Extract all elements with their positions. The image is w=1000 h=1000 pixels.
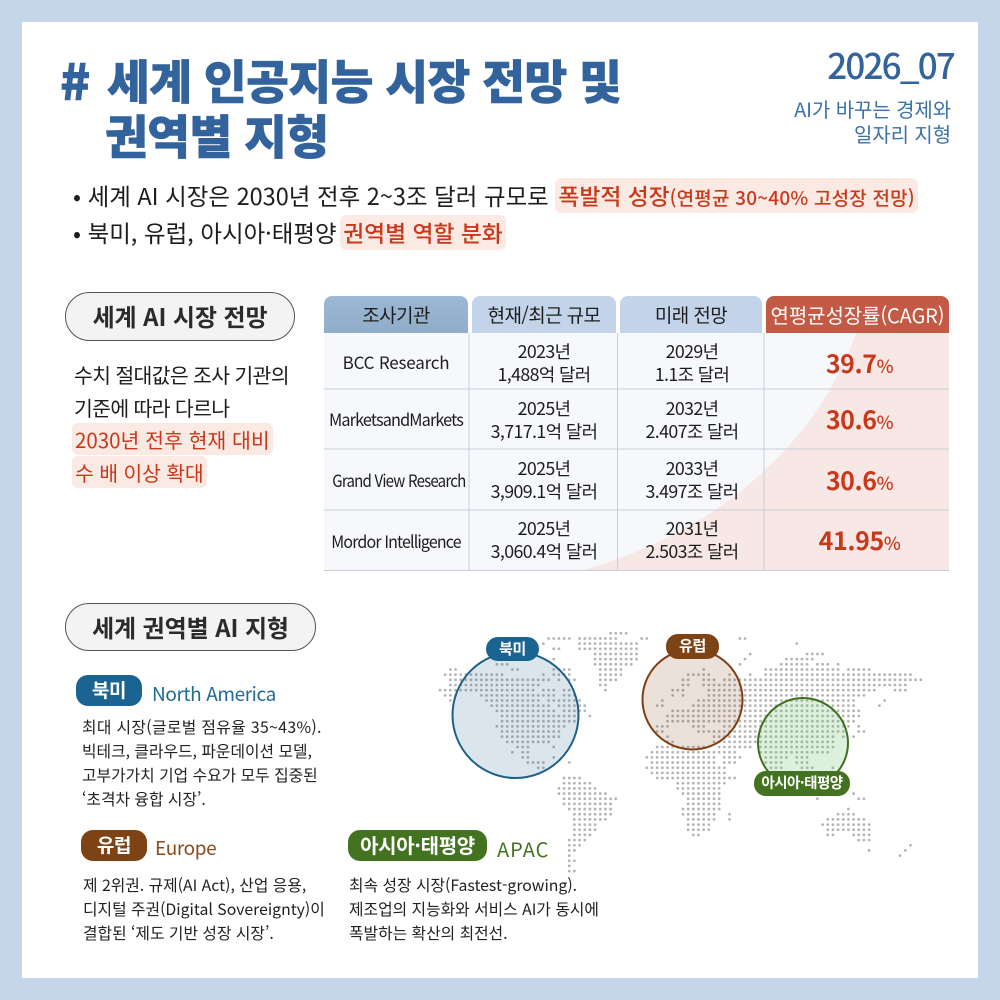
- table header: current size: [472, 296, 616, 333]
- row: BCC Research: [343, 338, 893, 387]
- row: BCC Research: 39.7%: [826, 345, 893, 381]
- series subtitle: AI가 바꾸는 경제와: [794, 94, 951, 123]
- map label: APAC: 아시아·태평양: [761, 772, 843, 793]
- row: MarketsandMarkets: 3,717.1억 달러: [491, 418, 597, 444]
- heading: regional AI landscape: [65, 603, 316, 651]
- row: MarketsandMarkets: 2.407조 달러: [645, 418, 739, 444]
- text: North America: 최대 시장(글로벌 점유율 35~43%).: [82, 715, 322, 738]
- title: #: [60, 43, 90, 115]
- map label: North America: [486, 637, 539, 661]
- row: MarketsandMarkets: MarketsandMarkets: [329, 406, 463, 431]
- row: Mordor Intelligence: 2031년: [666, 515, 718, 541]
- row: BCC Research: 2023년: [518, 338, 570, 364]
- market forecast table: [324, 333, 949, 571]
- row: BCC Research: BCC Research: [343, 349, 449, 374]
- market outlook text: 수치 절대값은 조사 기관의: [74, 359, 289, 389]
- tag: North America: 북미: [92, 676, 126, 703]
- series subtitle: [794, 94, 951, 148]
- row: Grand View Research: 3.497조 달러: [645, 478, 739, 504]
- english name: Europe: Europe: [155, 834, 216, 861]
- heading: regional AI landscape: 세계 권역별 AI 지형: [92, 609, 289, 644]
- text: North America: 빅테크, 클라우드, 파운데이션 모델,: [82, 739, 312, 762]
- title: 세계 인공지능 시장 전망 및: [107, 46, 621, 113]
- region circle: North America: [452, 652, 578, 778]
- text: North America: 고부가가치 기업 수요가 모두 집중된: [82, 763, 318, 786]
- row: BCC Research: 2029년: [666, 338, 718, 364]
- map label: North America: 북미: [499, 638, 526, 659]
- table header: research firm: [324, 296, 468, 333]
- key bullet points: • 세계 AI 시장은 2030년 전후 2~3조 달러 규모로 폭발적 성장(연평균 30~40% 고성장 전망): [73, 178, 915, 212]
- row: Mordor Intelligence: 2.503조 달러: [645, 538, 739, 564]
- row: Grand View Research: 30.6%: [826, 462, 893, 498]
- text: APAC: 제조업의 지능화와 서비스 AI가 동시에: [349, 897, 599, 920]
- text: North America: ‘초격차 융합 시장’.: [82, 787, 206, 810]
- table header: research firm: 조사기관: [362, 301, 430, 328]
- map label: Europe: 유럽: [679, 635, 706, 656]
- text: North America: [82, 715, 322, 810]
- row: MarketsandMarkets: 2025년: [518, 395, 570, 421]
- english name: North America: North America: [152, 680, 276, 707]
- key bullet points: • 북미, 유럽, 아시아·태평양 권역별 역할 분화: [73, 215, 503, 249]
- table header: current size: 현재/최근 규모: [488, 301, 600, 328]
- row: Mordor Intelligence: [331, 515, 900, 564]
- row: MarketsandMarkets: 2032년: [666, 395, 718, 421]
- tag: APAC: 아시아·태평양: [360, 830, 475, 859]
- row: Grand View Research: 3,909.1억 달러: [491, 478, 597, 504]
- row: Grand View Research: 2025년: [518, 455, 570, 481]
- row: BCC Research: 1,488억 달러: [497, 361, 591, 387]
- row: Grand View Research: Grand View Research: [332, 467, 465, 492]
- region circle: APAC: [758, 698, 848, 788]
- row: MarketsandMarkets: 30.6%: [826, 401, 893, 437]
- row: BCC Research: 1.1조 달러: [655, 361, 729, 387]
- market outlook text: 2030년 전후 현재 대비: [75, 424, 270, 454]
- market outlook text: 기준에 따라 다르나: [74, 392, 229, 422]
- text: APAC: [349, 873, 599, 944]
- row: Mordor Intelligence: 41.95%: [819, 522, 900, 558]
- row: Grand View Research: 2033년: [666, 455, 718, 481]
- text: APAC: 폭발하는 확산의 최전선.: [349, 921, 508, 944]
- market outlook text: [72, 359, 289, 488]
- english name: APAC: APAC: [497, 834, 549, 863]
- row: Mordor Intelligence: Mordor Intelligence: [331, 528, 461, 553]
- row: Grand View Research: [332, 455, 893, 504]
- tag: Europe: [81, 830, 147, 861]
- table header: forecast: [620, 296, 762, 333]
- row: MarketsandMarkets: [329, 395, 893, 444]
- text: APAC: 최속 성장 시장(Fastest-growing).: [349, 873, 577, 896]
- table background with growth curve: [324, 333, 949, 571]
- series subtitle: 일자리 지형: [854, 119, 951, 148]
- text: Europe: 디지털 주권(Digital Sovereignty)이: [83, 897, 325, 920]
- text: Europe: 제 2위권. 규제(AI Act), 산업 응용,: [83, 873, 306, 896]
- market outlook text: 수 배 이상 확대: [75, 456, 204, 486]
- region circle: Europe: [642, 650, 742, 750]
- row: Mordor Intelligence: 2025년: [518, 515, 570, 541]
- issue date: 2026_07: [827, 39, 954, 90]
- table header: forecast: 미래 전망: [655, 301, 727, 328]
- title: 권역별 지형: [105, 101, 329, 168]
- key bullet points: [73, 178, 918, 250]
- heading: global AI market outlook: [65, 292, 295, 341]
- heading: global AI market outlook: 세계 AI 시장 전망: [93, 298, 267, 333]
- tag: North America: [76, 675, 142, 706]
- text: Europe: 결합된 ‘제도 기반 성장 시장’.: [83, 921, 274, 944]
- title: [60, 43, 621, 168]
- map label: Europe: [666, 634, 719, 659]
- row: Mordor Intelligence: 3,060.4억 달러: [491, 538, 597, 564]
- dotted continents: [440, 633, 921, 871]
- table header: CAGR: 연평균성장률(CAGR): [771, 300, 944, 329]
- text: Europe: [83, 873, 325, 944]
- world dot map with region circles: [438, 632, 922, 872]
- tag: Europe: 유럽: [97, 831, 131, 858]
